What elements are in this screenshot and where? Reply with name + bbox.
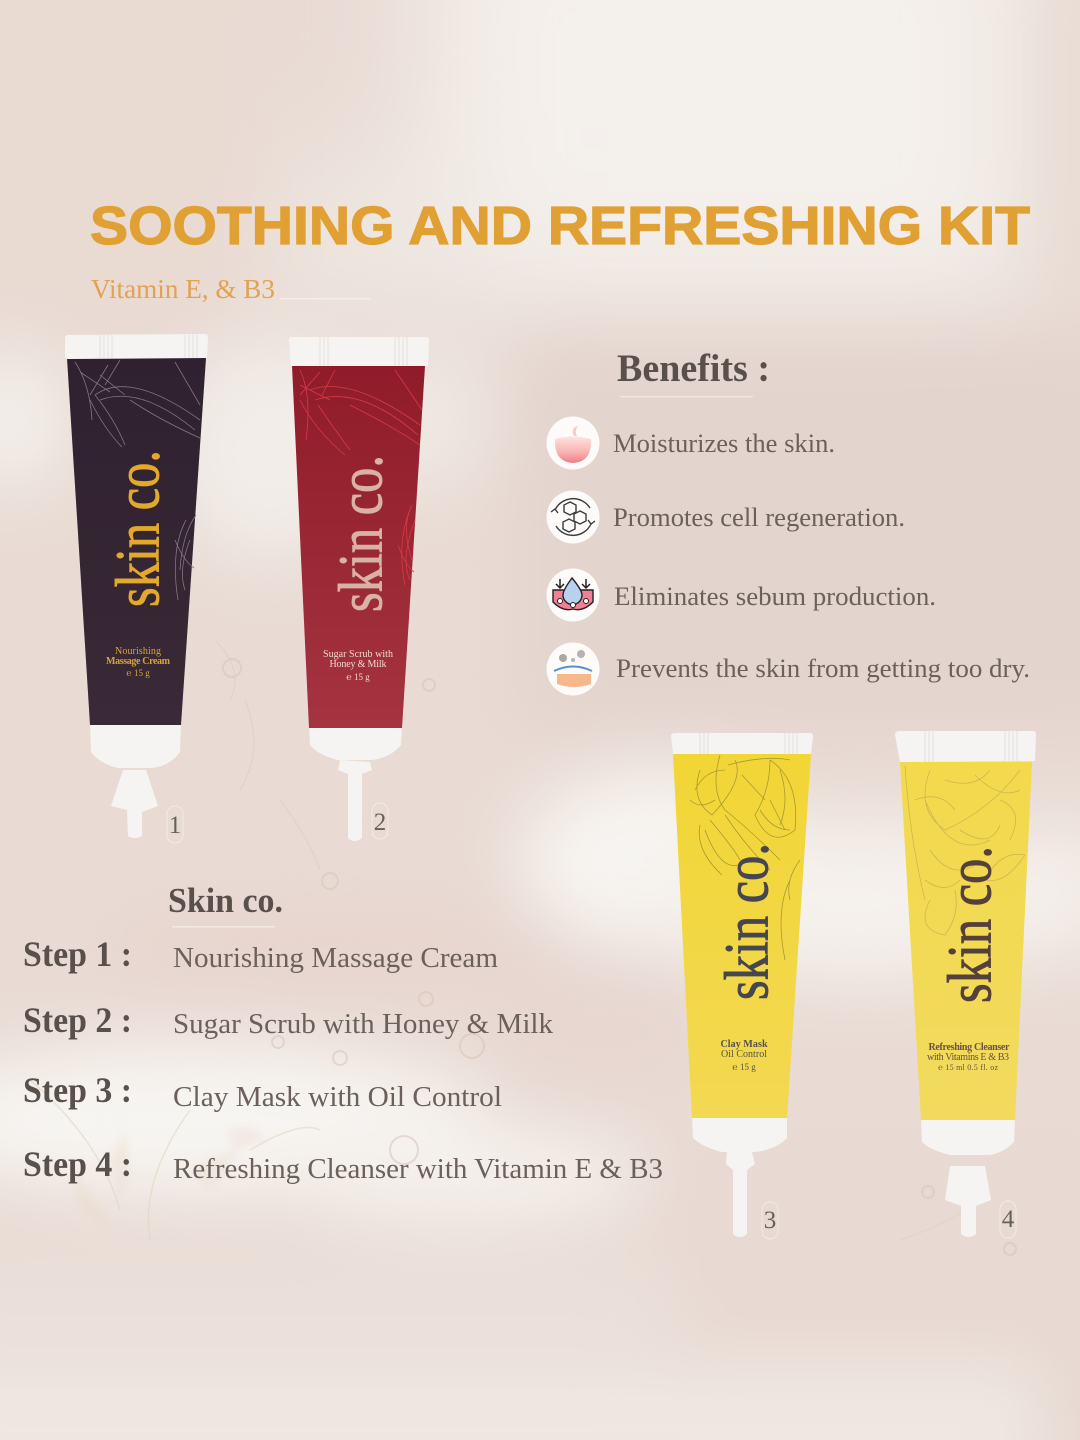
number 2 [372,803,388,839]
step 3 [23,1070,502,1113]
product tube 3: clay mask: Oil Control [721,1049,767,1060]
product tube 3: clay mask: Clay Mask [720,1039,768,1050]
product tube 2: sugar scrub: Sugar Scrub with [323,649,393,660]
number 2: 2 [374,809,386,836]
benefit 4: Prevents the skin from getting too dry. [616,654,1030,683]
number 4 [1000,1201,1016,1238]
step 3: Step 3 : [23,1070,132,1110]
step 2 [23,1000,553,1040]
product tube 1: massage cream: Nourishing [115,646,161,657]
product tube 2: sugar scrub: Honey & Milk [330,659,386,670]
step 4: Refreshing Cleanser with Vitamin E & B3 [173,1153,663,1185]
step 3: Clay Mask with Oil Control [173,1081,502,1113]
subtitle: Vitamin E, & B3 [91,274,275,304]
benefit 2: Promotes cell regeneration. [613,503,905,532]
step 4: Step 4 : [23,1144,132,1184]
step 1: Nourishing Massage Cream [173,942,498,974]
product tube 2: sugar scrub [289,337,429,841]
product tube 4: refreshing cleanser: skin co. [936,846,1004,1003]
step 4 [23,1144,663,1185]
product tube 3: clay mask [671,733,813,1237]
product tube 1: massage cream [65,334,208,838]
number 1: 1 [169,812,181,839]
icon: sebum control [546,568,600,622]
product tube 1: massage cream: skin co. [104,450,172,607]
icon: cell regeneration [546,490,600,544]
product tube 4: refreshing cleanser: ℮ 15 ml 0.5 fl. oz [938,1063,998,1072]
product tube 4: refreshing cleanser: Refreshing Cleanser [928,1042,1010,1053]
product tube 3: clay mask: skin co. [714,843,782,1000]
product tube 1: massage cream: Massage Cream [106,656,171,667]
number 4: 4 [1002,1206,1015,1233]
splash petals [70,1127,265,1230]
number 3 [762,1202,778,1239]
product tube 4: refreshing cleanser: with Vitamins E & B3 [927,1052,1009,1063]
splash and droplets [30,640,1016,1255]
product tube 3: clay mask: ℮ 15 g [732,1062,756,1072]
icon: skin barrier [546,642,600,696]
benefits heading: Benefits : [617,347,770,390]
product tube 2: sugar scrub: ℮ 15 g [346,672,370,682]
product tube 2: sugar scrub: skin co. [328,455,396,612]
product tube 4: refreshing cleanser [895,731,1036,1237]
number 1 [167,806,183,843]
steps heading: Skin co. [168,881,283,920]
icon: moisturizer bowl [546,416,600,470]
step 2: Step 2 : [23,1000,132,1040]
benefit 1: Moisturizes the skin. [613,429,835,458]
number 3: 3 [764,1207,776,1234]
title: SOOTHING AND REFRESHING KIT [90,196,1030,256]
step 1 [23,934,498,974]
benefit 3: Eliminates sebum production. [614,582,936,611]
step 1: Step 1 : [23,934,132,974]
product tube 1: massage cream: ℮ 15 g [126,668,150,678]
step 2: Sugar Scrub with Honey & Milk [173,1008,553,1040]
